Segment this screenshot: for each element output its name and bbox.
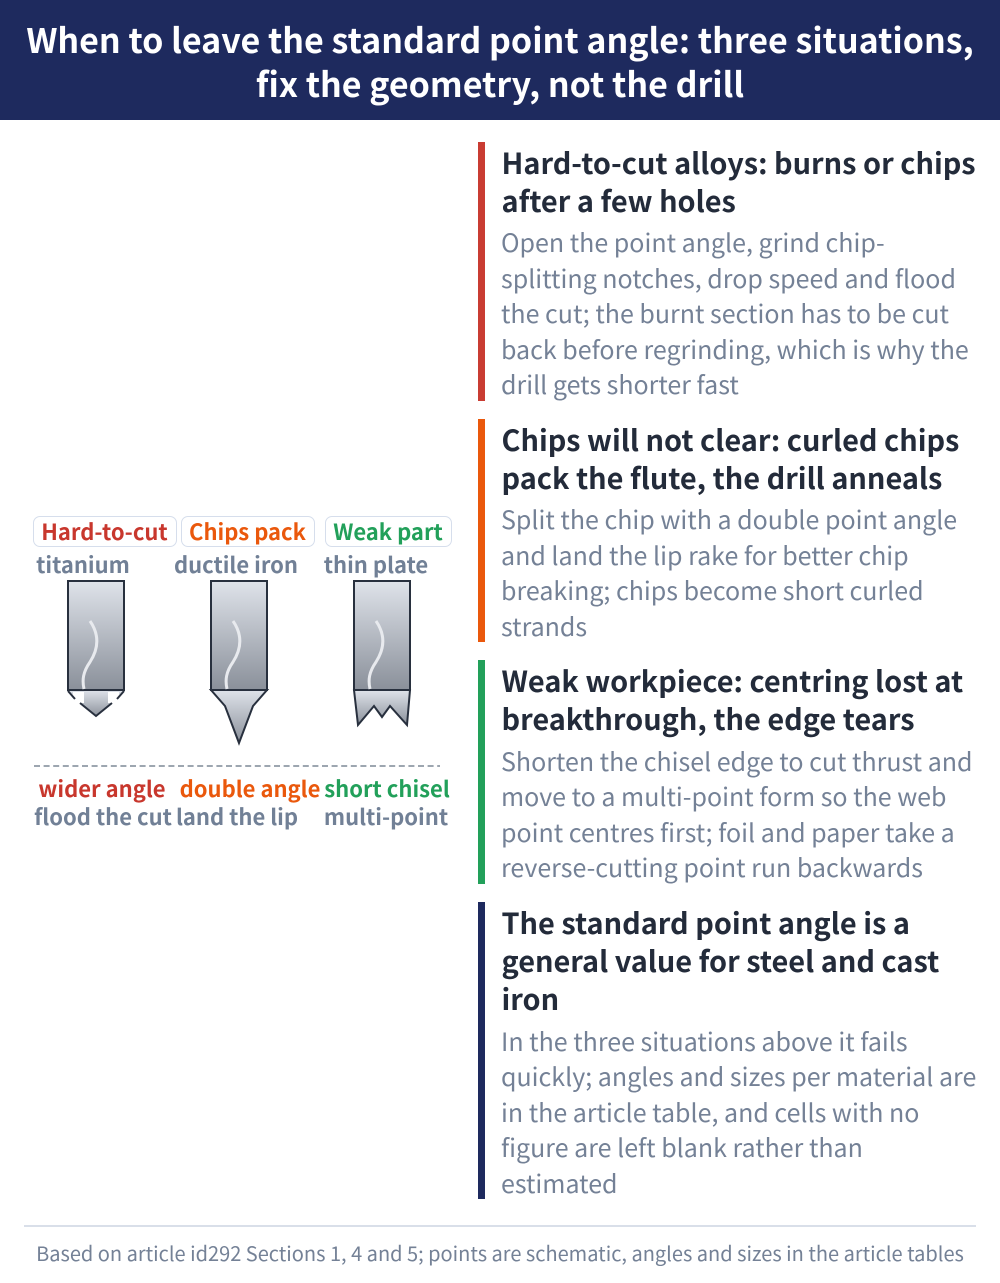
body text: move to a multi-point form so the web — [501, 778, 946, 814]
panel: standard point angle — [478, 901, 976, 1200]
label: thin plate: thin plate — [324, 548, 428, 580]
label: wider angle: wider angle — [38, 772, 166, 804]
label: titanium: titanium — [36, 548, 130, 580]
title banner: When to leave the standard point angle: three situations, — [26, 14, 974, 63]
body text: breaking; chips become short curled — [501, 572, 924, 608]
heading — [502, 418, 959, 498]
body text: point centres first; foil and paper take a — [501, 814, 955, 850]
body text: Shorten the chisel edge to cut thrust and — [501, 742, 973, 778]
body text — [501, 1022, 976, 1200]
body text: estimated — [501, 1164, 618, 1200]
heading: general value for steel and cast — [502, 939, 939, 981]
footer source note — [24, 1225, 976, 1277]
body text — [501, 501, 957, 644]
body text: drill gets shorter fast — [501, 366, 739, 402]
label: land the lip: land the lip — [176, 800, 298, 832]
heading — [502, 659, 963, 739]
panel: weak workpiece — [478, 659, 973, 885]
body text: the cut; the burnt section has to be cut — [501, 295, 949, 331]
body text — [501, 224, 969, 402]
body text: back before regrinding, which is why the — [501, 330, 969, 366]
heading: breakthrough, the edge tears — [502, 697, 914, 739]
title banner — [0, 0, 1000, 120]
panel: hard-to-cut alloys — [478, 141, 976, 402]
footer source note: Based on article id292 Sections 1, 4 and 5; points are schematic, angles and sizes in the article tables — [36, 1238, 964, 1267]
diagram: drill points — [33, 515, 452, 832]
drills illustration — [34, 580, 440, 767]
drill 3: short chisel — [354, 581, 410, 725]
label: ductile iron: ductile iron — [174, 548, 298, 580]
drill 2: double angle — [211, 581, 267, 743]
body text: Open the point angle, grind chip- — [501, 224, 885, 260]
heading: iron — [502, 977, 559, 1019]
label: flood the cut: flood the cut — [34, 800, 172, 832]
heading — [502, 141, 976, 221]
body text: quickly; angles and sizes per material are — [501, 1058, 976, 1094]
accent bar — [478, 419, 485, 642]
title banner: fix the geometry, not the drill — [256, 58, 744, 107]
label: double angle: double angle — [180, 772, 320, 804]
body text: in the article table, and cells with no — [501, 1094, 919, 1130]
heading: Chips will not clear: curled chips — [502, 418, 959, 460]
body text: In the three situations above it fails — [501, 1022, 908, 1058]
label: Chips pack: Chips pack — [189, 515, 306, 547]
drill 1: wider angle — [68, 581, 124, 717]
label: multi-point: multi-point — [324, 800, 448, 832]
label: Hard-to-cut: Hard-to-cut — [41, 515, 168, 547]
body text: reverse-cutting point run backwards — [501, 849, 923, 885]
heading: Hard-to-cut alloys: burns or chips — [502, 141, 976, 183]
heading — [502, 901, 939, 1019]
accent bar — [478, 142, 485, 401]
label: Weak part: Weak part — [333, 515, 443, 547]
heading: pack the flute, the drill anneals — [502, 456, 942, 498]
body text: figure are left blank rather than — [501, 1129, 863, 1165]
accent bar — [478, 660, 485, 884]
heading: Weak workpiece: centring lost at — [502, 659, 963, 701]
body text: strands — [501, 608, 587, 644]
heading: The standard point angle is a — [502, 901, 910, 943]
heading: after a few holes — [502, 179, 736, 221]
panel: chips will not clear — [478, 418, 959, 644]
accent bar — [478, 902, 485, 1199]
body text: splitting notches, drop speed and flood — [501, 260, 956, 296]
body text: Split the chip with a double point angle — [501, 501, 957, 537]
body text: and land the lip rake for better chip — [501, 536, 909, 572]
label: short chisel: short chisel — [324, 772, 450, 804]
body text — [501, 742, 973, 885]
